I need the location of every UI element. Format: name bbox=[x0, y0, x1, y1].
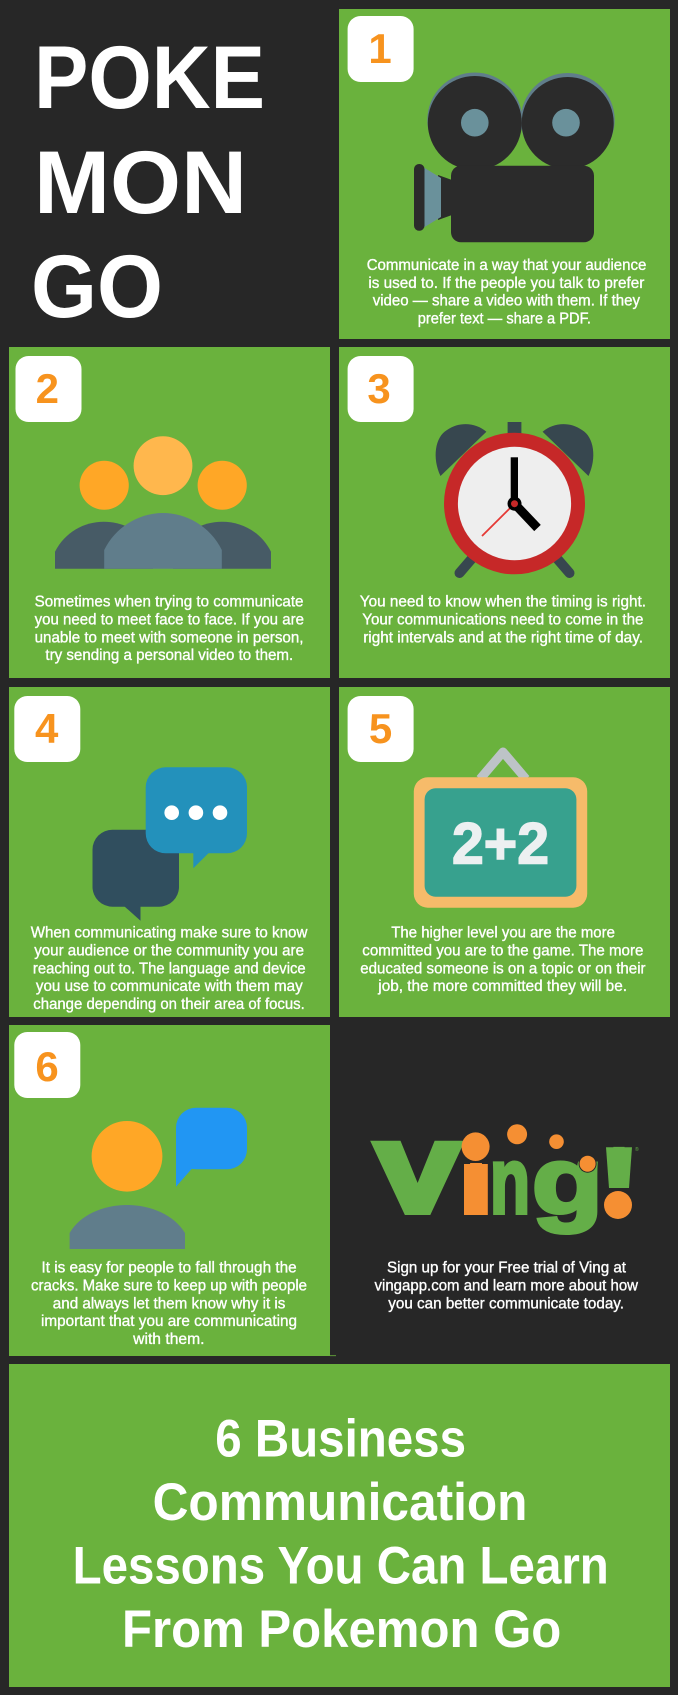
lesson 2 text: you need to meet face to face. If you are bbox=[35, 612, 304, 628]
call to action text: you can better communicate today. bbox=[388, 1295, 624, 1312]
lesson 6 text bbox=[31, 1260, 307, 1348]
badge 3: 3 bbox=[367, 365, 391, 412]
lesson 2 text bbox=[35, 594, 304, 664]
badge 1 bbox=[348, 16, 414, 82]
lesson 4 text: reaching out to. The language and device bbox=[33, 960, 306, 977]
icon: alarm clock bbox=[436, 422, 593, 574]
panel 5: chalkboard lesson bbox=[339, 687, 670, 1017]
badge 6 bbox=[14, 1032, 80, 1098]
title: POKE MON GO: GO bbox=[31, 236, 163, 336]
logo: Ving!: ı bbox=[464, 1126, 488, 1236]
title: POKE MON GO: MON bbox=[34, 132, 247, 232]
icon: person with speech bubble bbox=[70, 1108, 247, 1249]
footer heading: Communication bbox=[153, 1473, 528, 1532]
footer heading: Lessons You Can Learn bbox=[73, 1537, 609, 1596]
badge 2 bbox=[16, 356, 82, 422]
lesson 1 text: Communicate in a way that your audience bbox=[367, 257, 646, 274]
logo: Ving!: ® bbox=[635, 1146, 639, 1153]
badge 6: 6 bbox=[35, 1043, 59, 1090]
lesson 4 text: When communicating make sure to know bbox=[31, 925, 308, 942]
title: POKE MON GO: POKE bbox=[34, 27, 265, 127]
icon: chalkboard bbox=[414, 752, 587, 908]
logo: Ving!: g bbox=[532, 1128, 603, 1233]
footer heading: From Pokemon Go bbox=[122, 1600, 561, 1659]
lesson 2 text: unable to meet with someone in person, bbox=[35, 629, 303, 646]
panel 6: person with speech bubble lesson bbox=[9, 1025, 336, 1356]
badge 5 bbox=[348, 696, 414, 762]
badge 4 bbox=[14, 696, 80, 762]
lesson 5 text: committed you are to the game. The more bbox=[362, 942, 643, 960]
lesson 4 text: change depending on their area of focus. bbox=[33, 996, 305, 1013]
panel 3: alarm clock lesson bbox=[339, 347, 670, 678]
panel 4: chat bubbles lesson bbox=[9, 687, 330, 1017]
logo: Ving!: V bbox=[378, 1126, 458, 1232]
lesson 6 text: It is easy for people to fall through the bbox=[42, 1260, 297, 1277]
lesson 5 text bbox=[360, 925, 646, 995]
lesson 5 text: The higher level you are the more bbox=[391, 925, 615, 942]
lesson 3 text: You need to know when the timing is right. bbox=[360, 594, 646, 611]
call to action text: Sign up for your Free trial of Ving at bbox=[387, 1260, 627, 1277]
lesson 6 text: important that you are communicating bbox=[41, 1313, 297, 1330]
panel 2: people lesson bbox=[9, 347, 330, 678]
lesson 3 text bbox=[360, 594, 646, 646]
lesson 3 text: Your communications need to come in the bbox=[362, 612, 643, 628]
badge 2: 2 bbox=[36, 365, 59, 412]
panel 1: video camera lesson bbox=[339, 9, 670, 339]
lesson 1 text: video — share a video with them. If they bbox=[373, 293, 640, 310]
badge 1: 1 bbox=[368, 25, 392, 72]
lesson 1 text: prefer text — share a PDF. bbox=[418, 311, 591, 328]
lesson 6 text: and always let them know why it is bbox=[53, 1295, 286, 1312]
lesson 2 text: try sending a personal video to them. bbox=[45, 647, 293, 664]
lesson 6 text: with them. bbox=[132, 1331, 204, 1348]
badge 5: 5 bbox=[369, 705, 392, 752]
title: POKE MON GO bbox=[31, 27, 265, 336]
lesson 4 text: you use to communicate with them may bbox=[36, 978, 303, 995]
lesson 4 text: your audience or the community you are bbox=[34, 942, 304, 960]
call to action text bbox=[374, 1260, 639, 1312]
logo: Ving!: ! bbox=[606, 1129, 632, 1223]
lesson 3 text: right intervals and at the right time of day. bbox=[363, 629, 643, 646]
footer heading bbox=[73, 1410, 609, 1659]
lesson 2 text: Sometimes when trying to communicate bbox=[35, 594, 303, 611]
call to action text: vingapp.com and learn more about how bbox=[374, 1278, 639, 1294]
lesson 4 text bbox=[31, 925, 308, 1013]
lesson 5 text: job, the more committed they will be. bbox=[377, 978, 627, 995]
icon: film camera bbox=[414, 72, 615, 242]
badge 4: 4 bbox=[35, 705, 59, 752]
lesson 5 text: educated someone is on a topic or on their bbox=[360, 960, 646, 977]
logo: Ving!: n bbox=[490, 1128, 530, 1233]
footer heading: 6 Business bbox=[215, 1410, 466, 1469]
logo: Ving! bbox=[378, 1124, 639, 1236]
icon: chalkboard: 2+2 bbox=[452, 812, 549, 876]
lesson 6 text: cracks. Make sure to keep up with people bbox=[31, 1278, 307, 1294]
lesson 1 text: is used to. If the people you talk to prefer bbox=[368, 275, 644, 292]
lesson 1 text bbox=[367, 257, 646, 328]
icon: group of people bbox=[55, 436, 271, 569]
badge 3 bbox=[348, 356, 414, 422]
footer banner bbox=[9, 1364, 670, 1687]
icon: chat bubbles bbox=[92, 767, 247, 921]
